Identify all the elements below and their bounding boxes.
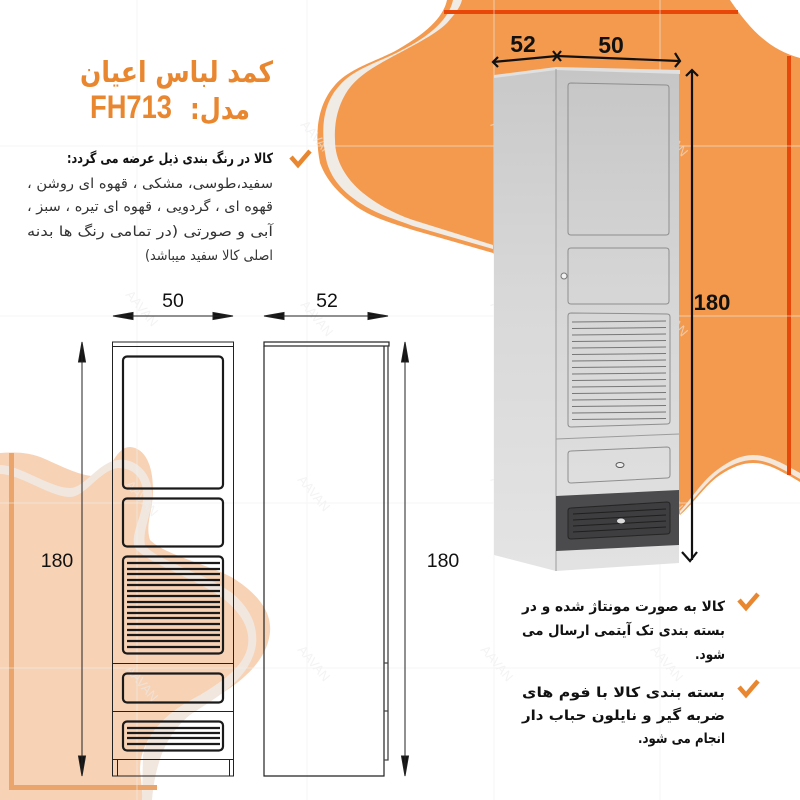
watermark pattern: AAVAN bbox=[295, 642, 333, 684]
text block: colours bbox=[27, 150, 274, 264]
dimension: 52: 52 bbox=[510, 31, 536, 57]
text block: assembly: بسته بندی تک آیتمی ارسال می bbox=[522, 621, 725, 639]
text block: packaging bbox=[521, 685, 725, 747]
cabinet body bbox=[494, 67, 680, 571]
watermark pattern: AAVAN bbox=[488, 297, 526, 339]
dark drawer bbox=[556, 490, 679, 551]
watermark pattern: AAVAN bbox=[648, 472, 686, 514]
watermark pattern: AAVAN bbox=[298, 117, 336, 159]
cabinet illustration bbox=[494, 67, 680, 571]
watermark pattern: AAVAN bbox=[488, 117, 526, 159]
title: مدل: bbox=[190, 92, 250, 126]
text block: colours: قهوه ای ، گردویی ، قهوه ای تیره ، سبز ، bbox=[27, 198, 273, 215]
watermark pattern: AAVAN bbox=[653, 117, 691, 159]
watermark pattern: AAVAN bbox=[123, 477, 161, 519]
icon: check color note bbox=[291, 151, 310, 165]
width arrow 50 bbox=[113, 312, 233, 320]
text block: colours: آبی و صورتی (در تمامی رنگ ها بدنه bbox=[27, 223, 274, 240]
dimension: 180: 180 bbox=[694, 290, 730, 315]
watermark pattern: AAVAN bbox=[123, 662, 161, 704]
watermark pattern: AAVAN bbox=[488, 472, 526, 514]
watermark pattern: AAVAN bbox=[478, 642, 516, 684]
side elevation drawing bbox=[264, 342, 389, 776]
bottom left peach blob bbox=[0, 447, 270, 800]
watermark pattern: AAVAN bbox=[123, 287, 161, 329]
title bbox=[80, 55, 273, 126]
icon: check packaging bbox=[739, 681, 758, 695]
front elevation drawing bbox=[112, 342, 234, 776]
label 180 left: 180 bbox=[41, 550, 73, 572]
text block: colours: اصلی کالا سفید میباشد) bbox=[145, 248, 273, 264]
text block: assembly: شود. bbox=[695, 647, 725, 663]
text block: colours: کالا در رنگ بندی ذیل عرضه می گردد: bbox=[67, 150, 274, 167]
text block: colours: سفید،طوسی، مشکی ، قهوه ای روشن ، bbox=[27, 176, 273, 192]
door knob bbox=[561, 273, 567, 279]
height arrow right bbox=[402, 342, 408, 776]
watermark pattern: AAVAN bbox=[648, 642, 686, 684]
top right orange blob bbox=[317, 0, 800, 515]
text block: packaging: ضربه گیر و نایلون حباب دار bbox=[521, 707, 725, 724]
cabinet door panels bbox=[568, 83, 670, 483]
title: FH713 bbox=[90, 89, 172, 125]
label 52: 52 bbox=[316, 290, 338, 312]
text block: packaging: بسته بندی کالا با فوم های bbox=[522, 685, 725, 701]
depth arrow 52 bbox=[264, 312, 388, 320]
icon: check assembly bbox=[739, 594, 758, 608]
top dimension arrows bbox=[493, 51, 680, 67]
watermark pattern: AAVAN bbox=[298, 297, 336, 339]
watermark pattern: AAVAN bbox=[653, 297, 691, 339]
label 180 right: 180 bbox=[427, 550, 459, 572]
text block: assembly: کالا به صورت مونتاژ شده و در bbox=[521, 599, 726, 615]
label 50: 50 bbox=[162, 290, 184, 312]
height arrow left bbox=[78, 342, 86, 776]
text block: packaging: انجام می شود. bbox=[638, 731, 725, 747]
title: کمد لباس اعیان bbox=[80, 55, 273, 89]
dimension: 50: 50 bbox=[598, 32, 624, 58]
height arrow bbox=[682, 70, 698, 561]
text block: assembly bbox=[521, 599, 726, 663]
watermark pattern: AAVAN bbox=[295, 472, 333, 514]
drawer handle bbox=[616, 462, 624, 468]
